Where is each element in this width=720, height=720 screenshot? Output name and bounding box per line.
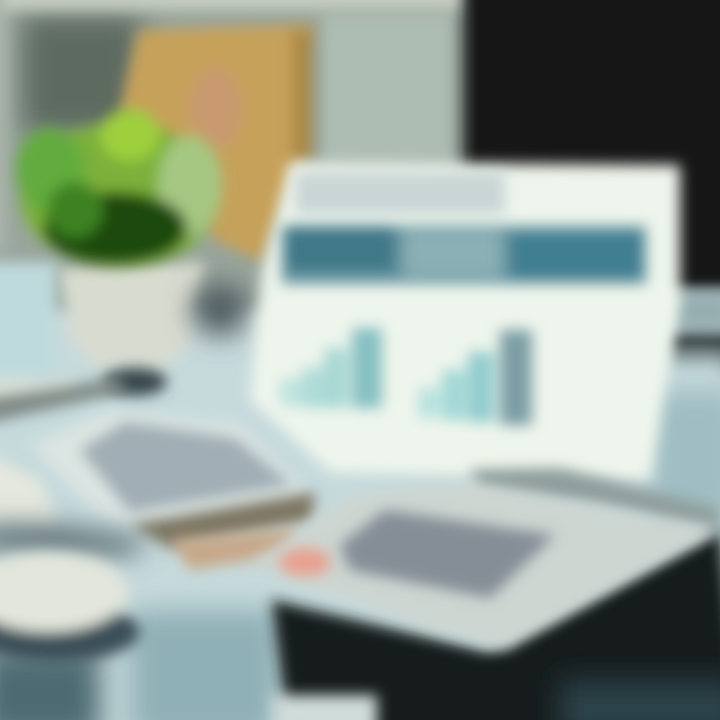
pink reflection	[279, 548, 331, 576]
laptop keypad	[340, 510, 555, 598]
laptop	[250, 482, 720, 720]
keyboard	[0, 410, 315, 570]
panel: printed financial report	[250, 162, 680, 480]
computer mouse	[0, 552, 140, 662]
laptop shadow	[272, 530, 720, 720]
left stack of papers	[0, 262, 125, 425]
bar chart: right	[418, 330, 532, 425]
icon: potted plant	[16, 109, 248, 396]
laptop body	[250, 482, 720, 650]
report sheet	[250, 162, 680, 480]
bar chart: left	[280, 328, 382, 408]
plant foliage	[16, 109, 222, 267]
desk surface	[0, 350, 720, 720]
bottom right desk tone	[560, 680, 720, 720]
bottom paper	[272, 695, 377, 720]
plant pot	[58, 262, 205, 372]
dark wall panel	[464, 0, 720, 378]
icon: pen	[470, 468, 720, 530]
teal table band	[282, 226, 646, 284]
report header strip	[295, 172, 505, 214]
picture frame	[120, 24, 314, 262]
